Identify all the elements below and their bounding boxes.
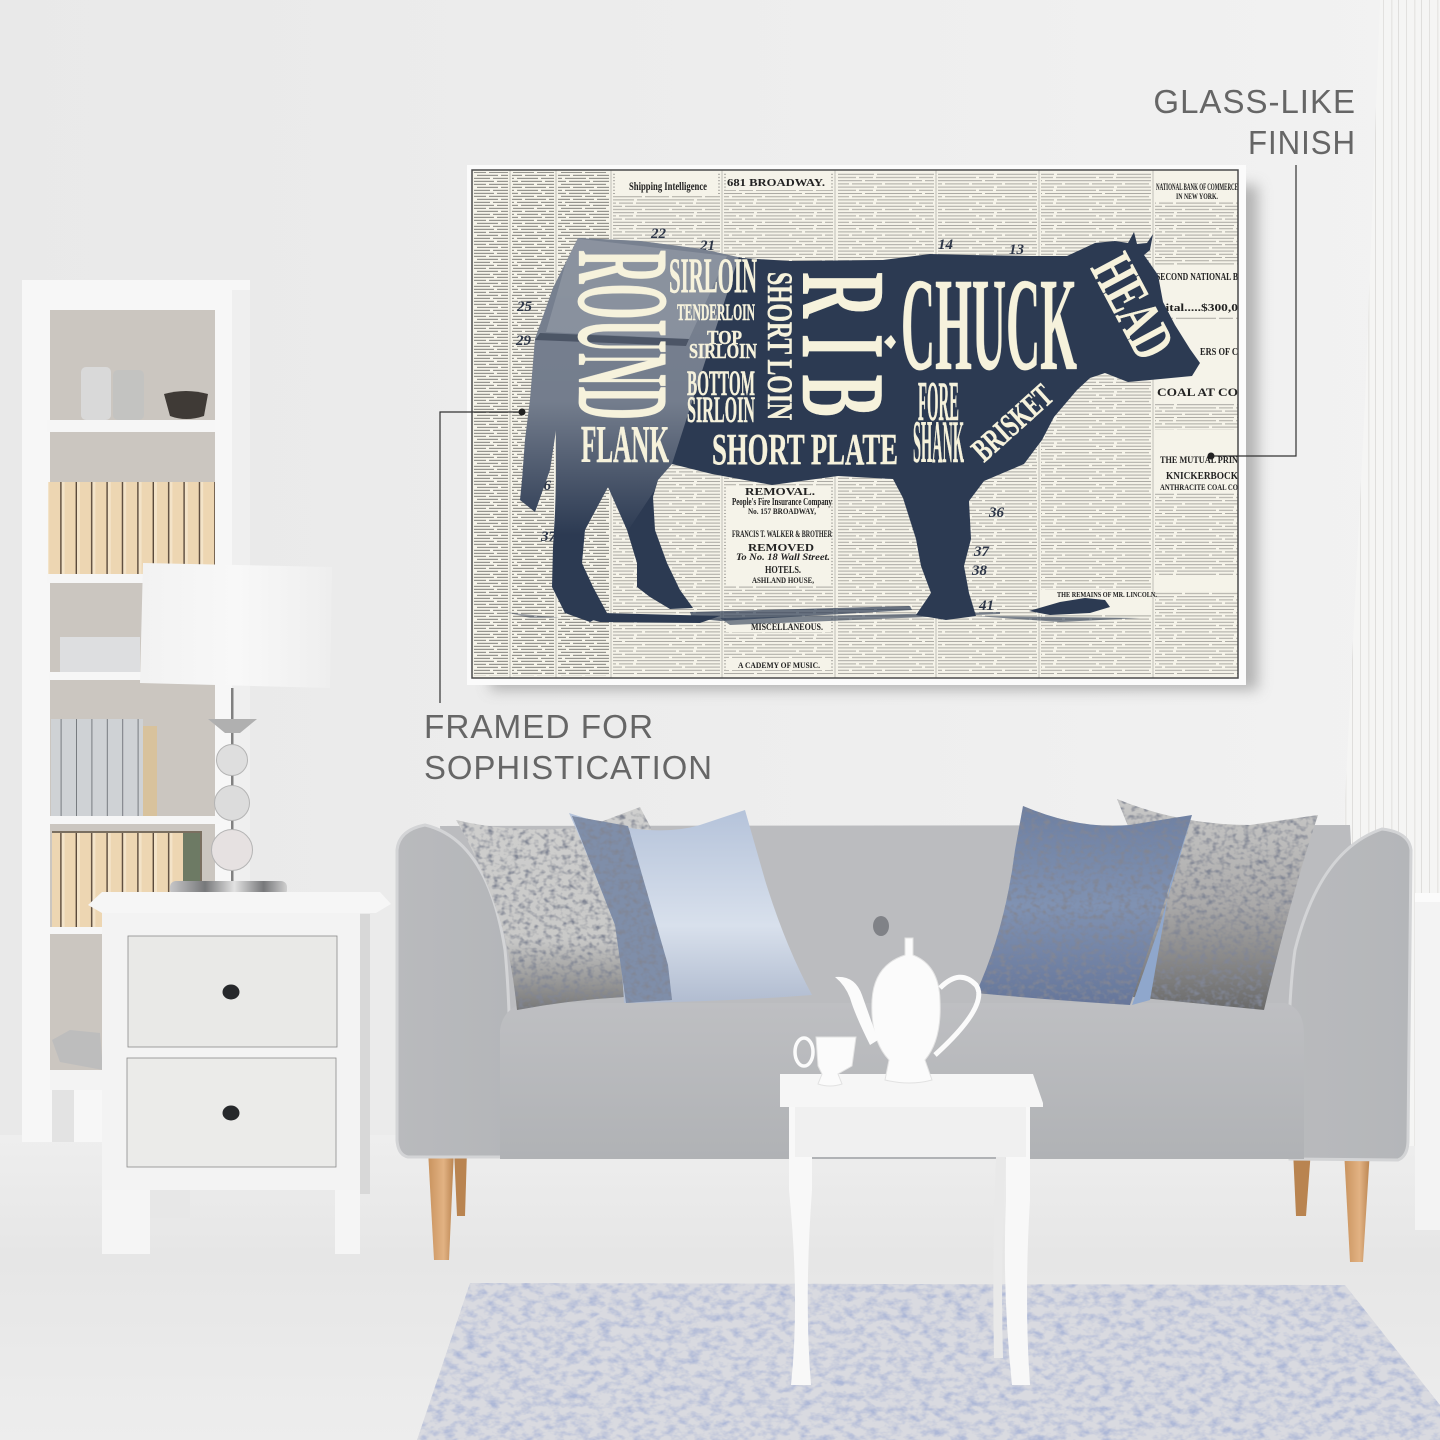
framed artwork [467,165,1258,690]
label: brisket: BRISKET [965,378,1061,469]
newspaper headlines: Shipping Intelligence [629,179,707,193]
newspaper headlines: HOTELS. [765,565,801,576]
callout: framed for sophistication: SOPHISTICATION [424,749,713,786]
handwritten numbers: 21 [699,238,715,254]
handwritten numbers: 37 [973,544,990,560]
handwritten numbers: 29 [515,333,532,349]
pillow light side strip [1132,815,1192,1005]
callout: glass-like finish: GLASS-LIKE [1153,83,1356,120]
callout: glass-like finish: FINISH [1248,124,1356,161]
newspaper headlines: SECOND NATIONAL B [1156,272,1238,283]
books: grey row [51,719,157,816]
handwritten numbers [515,226,1024,614]
knob lower [222,1106,240,1120]
newspaper headlines [629,177,1239,670]
blank ad spaces [615,172,1238,670]
newspaper headlines: No. 157 BROADWAY, [748,507,816,516]
callout: framed for sophistication [424,408,713,786]
newspaper background [472,170,1239,678]
column rules [510,170,1153,678]
newspaper headlines: To No. 18 Wall Street. [736,552,830,562]
label: bottom sirloin [687,363,755,431]
handwritten numbers: 13 [1009,242,1024,258]
callout: framed for sophistication: FRAMED FOR [424,708,654,745]
lamp shade [140,563,332,688]
wall [0,0,1440,1135]
drawer upper [128,936,337,1047]
books: upper row [48,482,215,574]
nightstand [88,892,391,1254]
teacup [795,1037,856,1086]
label: short plate: SHORT PLATE [712,425,898,474]
newspaper headlines: REMOVED [748,542,814,554]
handwritten numbers: 36 [988,505,1004,521]
newspaper headlines: ERS OF C [1200,346,1238,358]
handwritten numbers: 38 [971,563,988,579]
newspaper headlines: pital.....$300,0 [1158,302,1239,314]
newspaper headlines: NATIONAL BANK OF COMMERCE [1156,183,1238,193]
cut labels: SIRLOIN [687,390,755,431]
floor [0,1135,1440,1440]
newspaper headlines: A CADEMY OF MUSIC. [738,661,820,670]
cow silhouette [520,232,1200,622]
label: tenderloin: TENDERLOIN [677,300,755,325]
label: top sirloin: TOP [707,327,742,349]
ground scribble shadow [505,598,1140,625]
right side table edge [1415,893,1440,1230]
cut labels: CHUCK [901,250,1077,398]
handwritten numbers: 14 [938,237,954,253]
pillow: grey right [1117,799,1318,1010]
newspaper headlines: COAL AT CO [1157,385,1238,399]
newspaper headlines: MISCELLANEOUS. [751,622,823,632]
storage box [60,637,140,672]
newspaper headlines: REMOVAL. [745,487,816,498]
cut labels: SIRLOIN [669,247,757,303]
newspaper headlines: THE MUTUAL PRIN [1160,455,1238,465]
cut labels [550,243,1187,475]
pillow dark quilted band [572,816,672,1003]
cut labels: FORE [918,371,959,433]
pillow: grey left [456,807,651,1010]
knob upper [222,984,240,1000]
pillow: light blue [569,810,812,1003]
framed artwork: ROUND [550,250,697,420]
handwritten numbers: 41 [978,598,994,614]
lamp [140,563,332,896]
newspaper headlines: People's Fire Insurance Company [732,497,832,508]
bookcase [22,280,250,1142]
white frame [467,165,1246,685]
newspaper headlines: KNICKERBOCK [1166,471,1238,482]
cut labels: BOTTOM [687,363,755,403]
glass glare on cow [520,238,739,519]
sofa right arm [1288,829,1411,1160]
label: rib: R I B [777,272,910,417]
shelf back panel [50,310,215,1070]
pillow: dark blue [976,806,1192,1005]
sofa left arm [397,825,510,1157]
frame shadow [490,185,1258,690]
sofa button [873,916,889,936]
lamp stem and glass orbs [208,688,257,883]
rug [417,1283,1440,1440]
callout: glass-like finish [1153,83,1356,460]
newspaper headlines: ANTHRACITE COAL CO [1160,482,1238,492]
sofa legs [428,1150,1370,1262]
label: top sirloin: SIRLOIN [689,339,757,363]
silver plates [52,1030,103,1070]
diamond ornament [884,335,896,349]
handwritten numbers: 22 [650,226,666,242]
cut labels: SHANK [913,409,964,475]
teapot [835,938,979,1083]
handwritten numbers: 25 [516,299,532,315]
handwritten numbers: 46 [535,478,552,494]
newspaper headlines: 681 BROADWAY. [727,177,825,189]
newspaper headlines: ASHLAND HOUSE, [752,575,814,585]
newspaper headlines: FRANCIS T. WALKER & BROTHER [732,529,832,539]
lamp base [170,881,287,896]
label: short loin: SHORT LOIN [760,272,800,420]
books: lower row [52,831,202,927]
cut labels: FLANK [581,416,669,474]
sofa back [440,825,1360,1010]
sofa [397,799,1411,1262]
shelf: top objects [81,367,208,420]
drawer lower [127,1058,336,1167]
art border line [472,170,1238,678]
coffee table [780,1074,1043,1385]
curtain [1338,0,1440,1146]
newspaper headlines: THE REMAINS OF MR. LINCOLN. [1057,590,1157,599]
label: fore shank [913,371,964,475]
handwritten numbers: 37 [540,529,556,545]
sofa seat [500,1003,1304,1159]
label: top sirloin [689,327,757,363]
newspaper headlines: IN NEW YORK. [1176,192,1218,201]
label: head: HEAD [1079,243,1187,369]
